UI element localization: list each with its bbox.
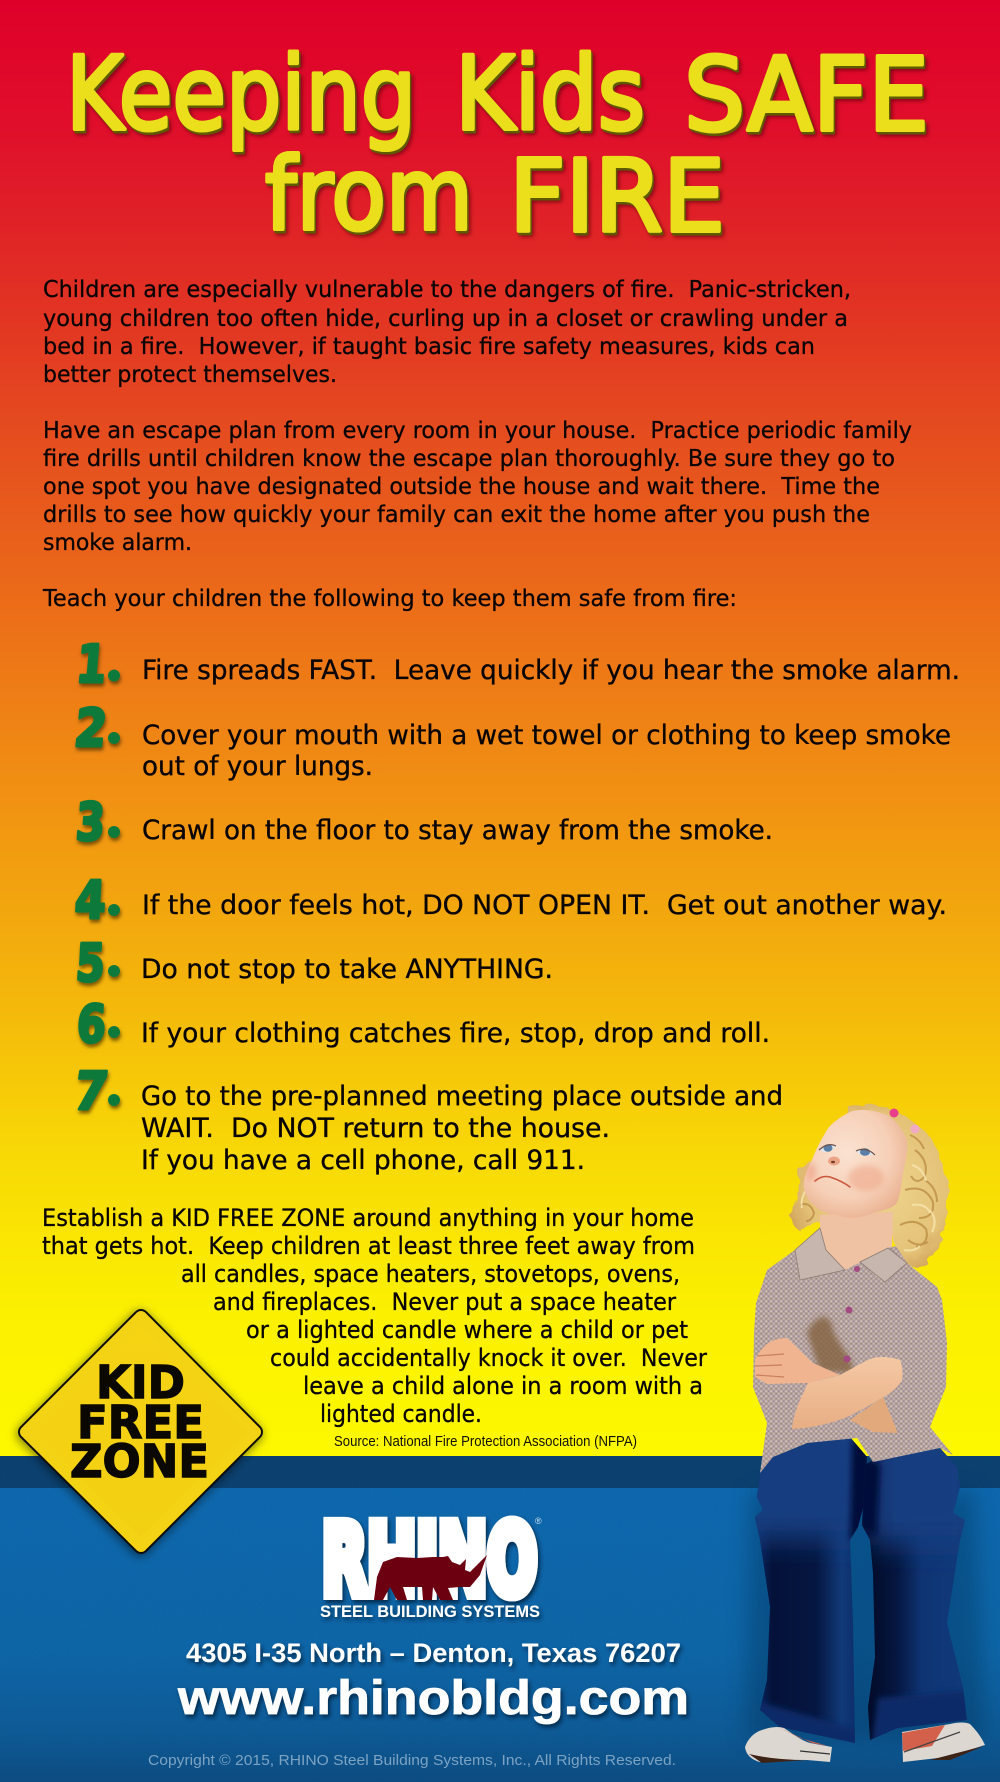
item 5: 5 xyxy=(74,934,106,994)
item 2: out of your lungs. xyxy=(142,751,373,782)
item 5: Do not stop to take ANYTHING. xyxy=(141,954,553,985)
item 3: 3 xyxy=(74,793,106,853)
face xyxy=(804,1110,907,1218)
hand xyxy=(755,1338,840,1384)
lower arm xyxy=(850,1397,898,1433)
item 7: WAIT. Do NOT return to the house. xyxy=(141,1113,610,1144)
source note: Source: National Fire Protection Association (NFPA) xyxy=(334,1433,637,1450)
leg shadow xyxy=(745,1490,985,1740)
hair curls xyxy=(800,1135,937,1250)
item 2: Cover your mouth with a wet towel or clothing to keep smoke xyxy=(142,720,951,751)
shirt buttons xyxy=(844,1266,860,1362)
item 6 xyxy=(75,995,770,1055)
kid free zone paragraph: that gets hot. Keep children at least three feet away from xyxy=(42,1232,695,1260)
left cuff xyxy=(753,1383,810,1438)
item 1 xyxy=(74,635,960,695)
cheek xyxy=(806,1163,884,1191)
kid free zone paragraph: Establish a KID FREE ZONE around anything in your home xyxy=(42,1204,694,1232)
intro paragraph: better protect themselves. xyxy=(43,360,337,388)
numbered list xyxy=(70,635,960,1176)
address: 4305 I-35 North – Denton, Texas 76207 xyxy=(186,1638,681,1668)
escape plan paragraph: one spot you have designated outside the house and wait there. Time the xyxy=(43,472,880,500)
headband flowers xyxy=(890,1108,920,1134)
sign text: KID xyxy=(96,1356,185,1409)
list intro: Teach your children the following to keep them safe from fire: xyxy=(42,584,737,612)
item 3: Crawl on the floor to stay away from the smoke. xyxy=(142,815,773,846)
item 7: 7 xyxy=(70,1062,112,1122)
left leg xyxy=(755,1438,867,1743)
item 7 xyxy=(70,1062,783,1176)
right leg xyxy=(862,1448,967,1740)
kid free zone paragraph: leave a child alone in a room with a xyxy=(303,1372,703,1400)
escape plan paragraph: fire drills until children know the escape plan thoroughly. Be sure they go to xyxy=(43,444,895,472)
title: Kids xyxy=(455,35,645,154)
item 6: 6 xyxy=(75,995,107,1055)
icon: rhino silhouette xyxy=(374,1555,487,1600)
registered mark: ® xyxy=(535,1516,542,1526)
finger lines xyxy=(755,1354,784,1377)
neck xyxy=(820,1212,893,1272)
item 7: Go to the pre-planned meeting place outside and xyxy=(141,1081,783,1112)
intro paragraph: young children too often hide, curling up in a closet or crawling under a xyxy=(43,304,848,332)
item 2 xyxy=(72,699,951,782)
escape plan paragraph: Have an escape plan from every room in your house. Practice periodic family xyxy=(43,416,912,444)
escape plan paragraph: drills to see how quickly your family can exit the home after you push the xyxy=(43,500,870,528)
escape plan paragraph: smoke alarm. xyxy=(43,528,192,556)
kid free zone paragraph: lighted candle. xyxy=(320,1400,482,1428)
shirt xyxy=(753,1228,953,1473)
intro paragraph xyxy=(43,275,851,388)
item 4: If the door feels hot, DO NOT OPEN IT. Get out another way. xyxy=(142,890,947,921)
intro paragraph: Children are especially vulnerable to the dangers of fire. Panic-stricken, xyxy=(43,275,851,303)
item 1: Fire spreads FAST. Leave quickly if you hear the smoke alarm. xyxy=(142,655,960,686)
sign text: ZONE xyxy=(70,1435,209,1488)
kid free zone paragraph: could accidentally knock it over. Never xyxy=(270,1344,707,1372)
intro paragraph: bed in a fire. However, if taught basic fire safety measures, kids can xyxy=(43,332,815,360)
collar xyxy=(795,1228,907,1282)
item 4 xyxy=(73,871,947,931)
item 7: If you have a cell phone, call 911. xyxy=(141,1145,585,1176)
nose xyxy=(828,1156,840,1166)
kid free zone paragraph: all candles, space heaters, stovetops, ovens, xyxy=(181,1260,680,1288)
title: Keeping xyxy=(66,35,416,154)
sign text xyxy=(70,1356,209,1488)
rhino logo xyxy=(320,1504,542,1621)
item 6: If your clothing catches fire, stop, drop and roll. xyxy=(141,1018,770,1049)
copyright: Copyright © 2015, RHINO Steel Building Systems, Inc., All Rights Reserved. xyxy=(148,1752,676,1769)
left shoe xyxy=(745,1727,832,1763)
kid free zone paragraph: or a lighted candle where a child or pet xyxy=(246,1316,688,1344)
title: SAFE xyxy=(684,36,929,155)
shirt shadow xyxy=(807,1317,853,1373)
website: www.rhinobldg.com xyxy=(177,1672,689,1725)
kid free zone paragraph xyxy=(42,1204,707,1428)
escape plan paragraph xyxy=(43,416,912,556)
upper arm xyxy=(792,1357,903,1429)
item 3 xyxy=(74,793,773,853)
right cuff xyxy=(885,1388,932,1440)
title xyxy=(66,35,929,255)
hair xyxy=(790,1105,948,1268)
logo wordmark: RHINO xyxy=(322,1504,537,1616)
title: FIRE xyxy=(509,138,725,255)
item 1: 1 xyxy=(74,635,109,695)
logo tagline: STEEL BUILDING SYSTEMS xyxy=(320,1603,540,1621)
item 5 xyxy=(74,934,553,994)
kid free zone paragraph: and fireplaces. Never put a space heater xyxy=(213,1288,676,1316)
kid free zone sign xyxy=(26,1317,255,1546)
sign text: FREE xyxy=(77,1396,204,1449)
item 2: 2 xyxy=(72,699,110,759)
eyes xyxy=(819,1144,875,1156)
mouth xyxy=(815,1176,850,1187)
item 4: 4 xyxy=(73,871,107,931)
right shoe xyxy=(902,1722,985,1762)
title: from xyxy=(265,136,473,253)
footer panel: blue xyxy=(0,1456,1000,1782)
illustration: seated child xyxy=(735,1105,985,1763)
